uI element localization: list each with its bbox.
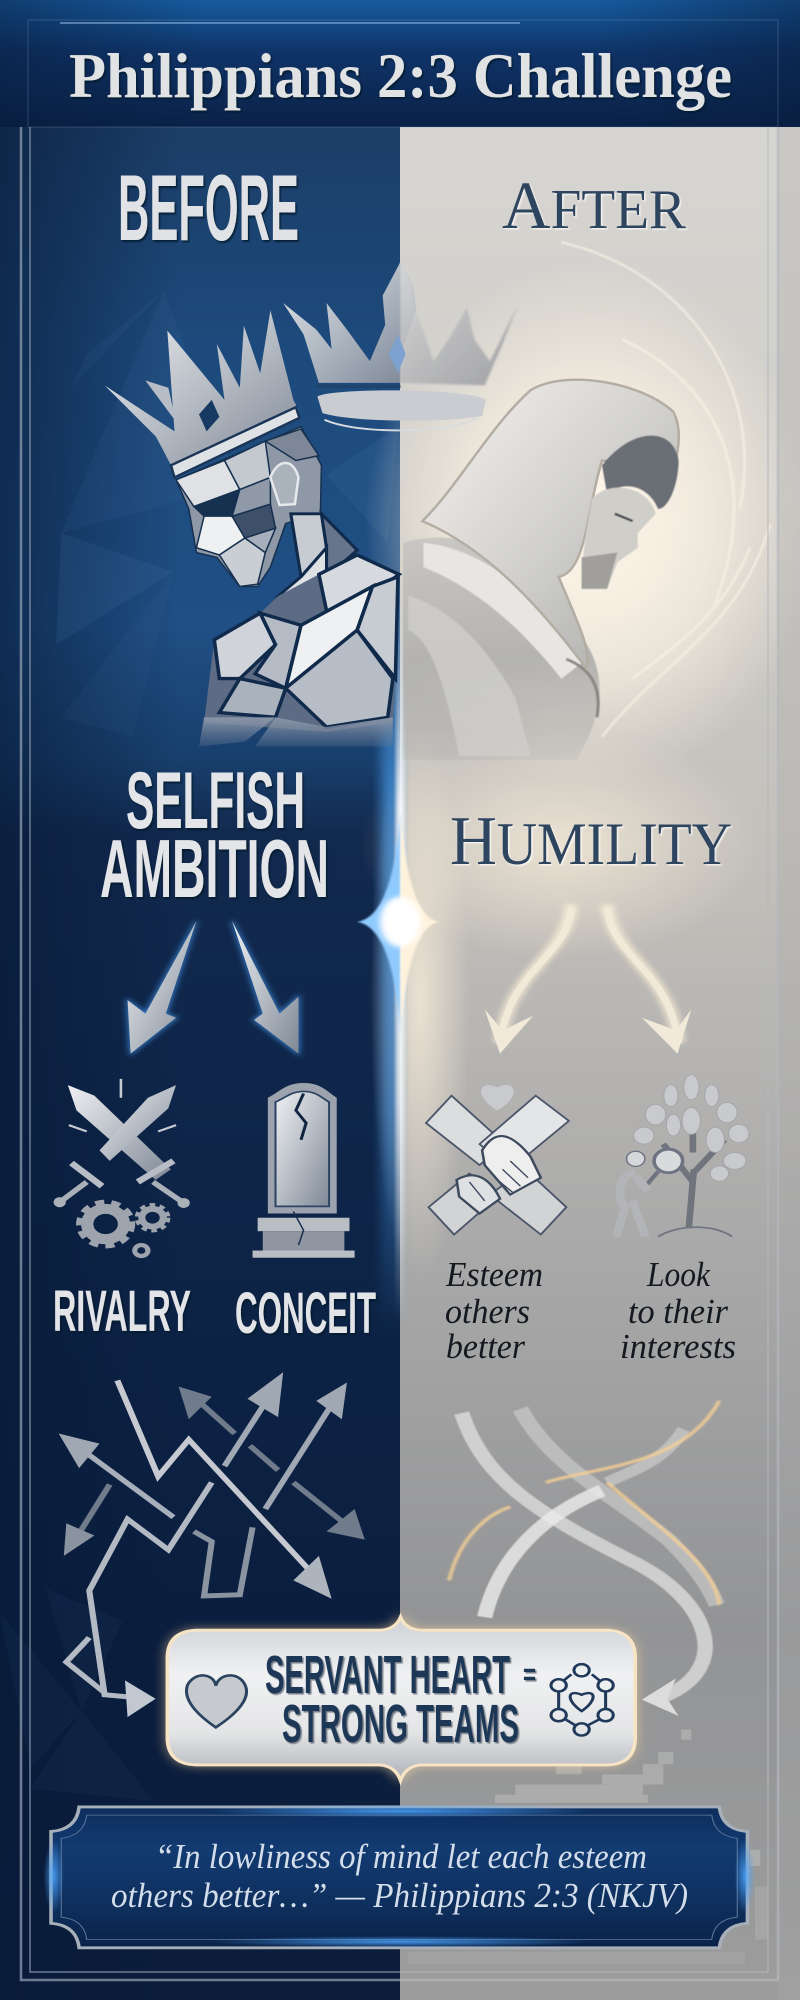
label: look to their interests: to their (628, 1292, 728, 1331)
label: look to their interests: Look (646, 1255, 711, 1294)
scripture text (111, 1837, 688, 1915)
arrows: humility branches (485, 904, 691, 1054)
central light divider (357, 590, 439, 1330)
figure: fractured king with crown (105, 310, 399, 746)
label: conceit: CONCEIT (235, 1281, 376, 1346)
label: look to their interests: interests (620, 1327, 736, 1366)
panel: before side background (0, 120, 400, 2000)
icon: team network (551, 1664, 613, 1736)
heading: after: AFTER (502, 167, 687, 243)
label: esteem others better: Esteem (445, 1255, 543, 1294)
label: esteem others better: others (445, 1292, 530, 1331)
heading: selfish ambition: SELFISH (126, 756, 305, 846)
scripture text: others better…” — Philippians 2:3 (NKJV) (111, 1876, 688, 1915)
king torso (199, 555, 399, 746)
heading: selfish ambition: AMBITION (100, 822, 329, 915)
title text: Philippians 2:3 Challenge (69, 41, 732, 111)
arrows: selfish ambition branches (128, 921, 298, 1054)
face and hair (582, 436, 679, 589)
king neck (278, 514, 357, 601)
scripture panel (43, 1805, 755, 1948)
callout text (265, 1645, 536, 1754)
chart: tangled arrows (59, 1372, 365, 1717)
panel: after side background (360, 120, 800, 2000)
icon: heart (187, 1675, 247, 1727)
icon: person with magnifier and tree (616, 1075, 749, 1237)
callout text: SERVANT HEART (265, 1645, 510, 1705)
icon: cracked mirror (253, 1083, 355, 1258)
label: esteem others better (445, 1255, 543, 1366)
chart: interwoven ribbons (449, 1401, 719, 1716)
icon: shared crown (283, 262, 518, 430)
infographic canvas: BEFORE (118, 155, 299, 260)
callout: servant heart strong teams (167, 1572, 635, 1805)
icon: clasped hands with heart (426, 1085, 569, 1235)
title banner (0, 0, 800, 127)
label: rivalry: RIVALRY (53, 1279, 191, 1344)
label: look to their interests (620, 1255, 736, 1366)
mosaic texture (408, 1729, 767, 1964)
heading: humility: HUMILITY (450, 803, 732, 880)
label: esteem others better: better (446, 1327, 525, 1366)
figure: humble robed figure (403, 380, 679, 760)
king face (176, 427, 321, 586)
crown on king (105, 310, 299, 477)
scripture text: “In lowliness of mind let each esteem (155, 1837, 647, 1876)
hood (422, 380, 679, 669)
callout text: STRONG TEAMS (282, 1694, 519, 1754)
icon: crossed swords and gears (54, 1079, 190, 1256)
robe (403, 537, 600, 760)
callout text: = (523, 1658, 536, 1691)
heading: selfish ambition (100, 756, 329, 915)
